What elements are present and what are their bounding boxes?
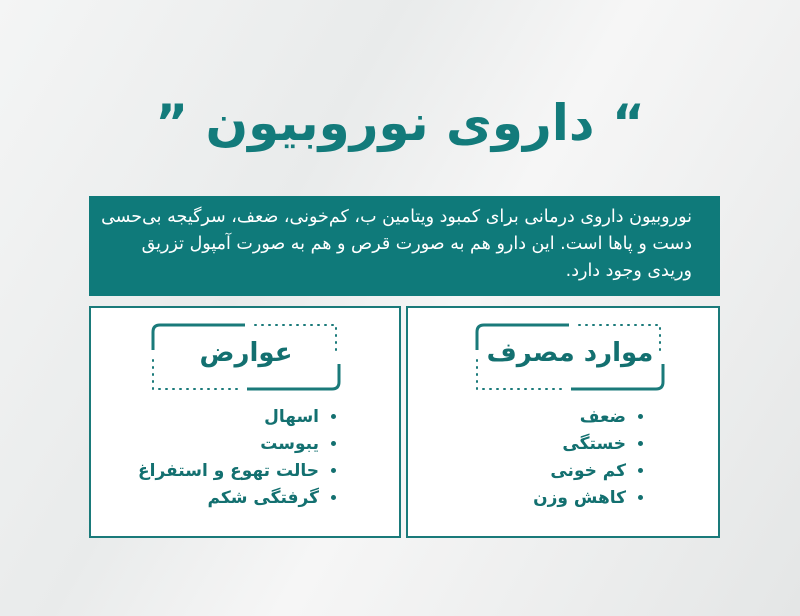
list: uses	[533, 407, 643, 508]
list: uses: ضعف	[580, 407, 626, 427]
list: side effects	[138, 407, 336, 508]
heading: uses: موارد مصرف	[487, 338, 653, 368]
list: side effects: گرفتگی شکم	[208, 488, 319, 508]
heading: uses	[476, 324, 664, 390]
heading: side effects: عوارض	[200, 338, 292, 368]
list: uses: کاهش وزن	[533, 488, 626, 508]
list: uses: کم خونی	[550, 461, 626, 481]
title: “ داروی نوروبیون ”	[155, 94, 645, 152]
intro text band: نوروبیون داروی درمانی برای کمبود ویتامین ب، کم‌خونی، ضعف، سرگیجه بی‌حسی دست و پاها است. این دارو هم به صورت قرص و هم به صورت آمپول تزریق وریدی وجود دارد.	[101, 207, 692, 281]
list: side effects: حالت تهوع و استفراغ	[138, 461, 319, 481]
heading: side effects	[152, 324, 340, 390]
panel: side effects	[89, 306, 401, 538]
panel: uses	[406, 306, 720, 538]
list: side effects: یبوست	[260, 434, 319, 454]
intro text band	[89, 196, 720, 296]
list: uses: خستگی	[562, 434, 626, 454]
list: side effects: اسهال	[264, 407, 319, 427]
